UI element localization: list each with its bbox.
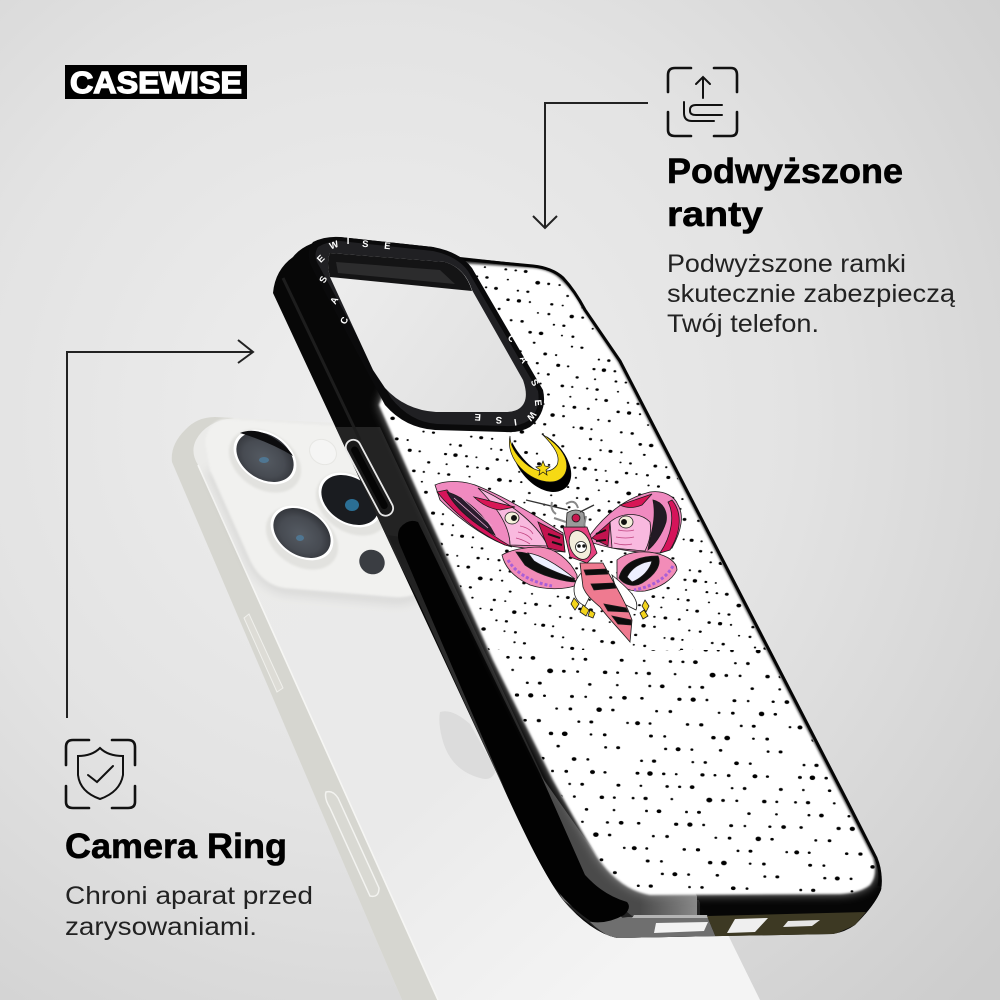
camera ring: E <box>384 241 391 252</box>
transparent phone case <box>273 237 882 940</box>
text block: camera ring description: Chroni aparat przed <box>65 882 313 910</box>
bottom wall, over phone <box>590 916 716 938</box>
bottom wall, over background <box>707 912 866 936</box>
lens 2 <box>260 494 344 572</box>
sensor <box>355 545 389 579</box>
inner band below the screen <box>541 776 697 916</box>
camera ring: S <box>317 274 330 285</box>
camera ring: E <box>315 253 327 265</box>
power button <box>343 437 396 518</box>
apple logo imprint <box>439 711 496 779</box>
camera ring: C <box>505 333 518 345</box>
right hindwing <box>617 552 677 591</box>
logo: CASEWISE: CASEWISE <box>70 65 242 100</box>
camera ring: I <box>513 416 517 427</box>
outer left strip <box>416 596 656 938</box>
heading: Podwyższone ranty <box>667 152 903 234</box>
camera ring: E <box>532 399 543 406</box>
camera plateau <box>205 416 420 600</box>
arrow: to raised edges <box>533 103 648 228</box>
moth illustration <box>435 481 681 642</box>
text block: raised edges description: Podwyższone ramki <box>667 250 906 278</box>
icon: shield with check <box>66 740 135 808</box>
left hindwing <box>502 547 577 589</box>
flash <box>305 434 341 470</box>
heading: Podwyższone ranty: ranty <box>667 195 764 234</box>
camera ring: I <box>347 236 349 247</box>
text block: camera ring description: zarysowaniami. <box>65 913 257 941</box>
text block: raised edges description: skutecznie zabezpieczą <box>667 280 955 308</box>
heading: Podwyższone ranty: Podwyższone <box>667 152 903 191</box>
thorax with skull <box>563 527 597 563</box>
black band on the right <box>696 888 882 914</box>
ports <box>654 918 820 933</box>
camera ring <box>309 236 544 432</box>
icon: raised edges <box>668 68 737 136</box>
camera ring: S <box>528 377 541 388</box>
camera ring: W <box>328 239 340 252</box>
left forewing <box>435 481 565 552</box>
camera ring: A <box>517 354 530 366</box>
text block: raised edges description: Twój telefon. <box>667 310 819 338</box>
arrow: to camera ring <box>67 340 253 718</box>
camera ring: W <box>524 409 538 423</box>
camera ring: E <box>474 411 481 422</box>
ring opening <box>328 253 526 412</box>
moth legs <box>571 572 649 619</box>
printed screen area with dot pattern <box>373 258 882 902</box>
text block: camera ring description <box>65 882 313 941</box>
lens 3 <box>308 461 392 539</box>
text block: raised edges description <box>667 250 955 338</box>
translucent section over the phone <box>330 427 700 940</box>
side buttons <box>244 614 379 896</box>
camera ring: S <box>362 239 369 250</box>
crescent moon with star <box>509 434 571 492</box>
head and antennae <box>526 500 594 527</box>
silver phone behind the case <box>172 416 760 1000</box>
camera ring: A <box>328 295 341 306</box>
lens 1 <box>223 418 307 496</box>
camera ring: C <box>338 315 351 326</box>
black side channel <box>398 521 629 922</box>
camera ring: S <box>496 414 502 425</box>
right forewing <box>590 492 681 553</box>
heading: Camera Ring: Camera Ring <box>65 827 287 866</box>
abdomen <box>580 563 632 642</box>
